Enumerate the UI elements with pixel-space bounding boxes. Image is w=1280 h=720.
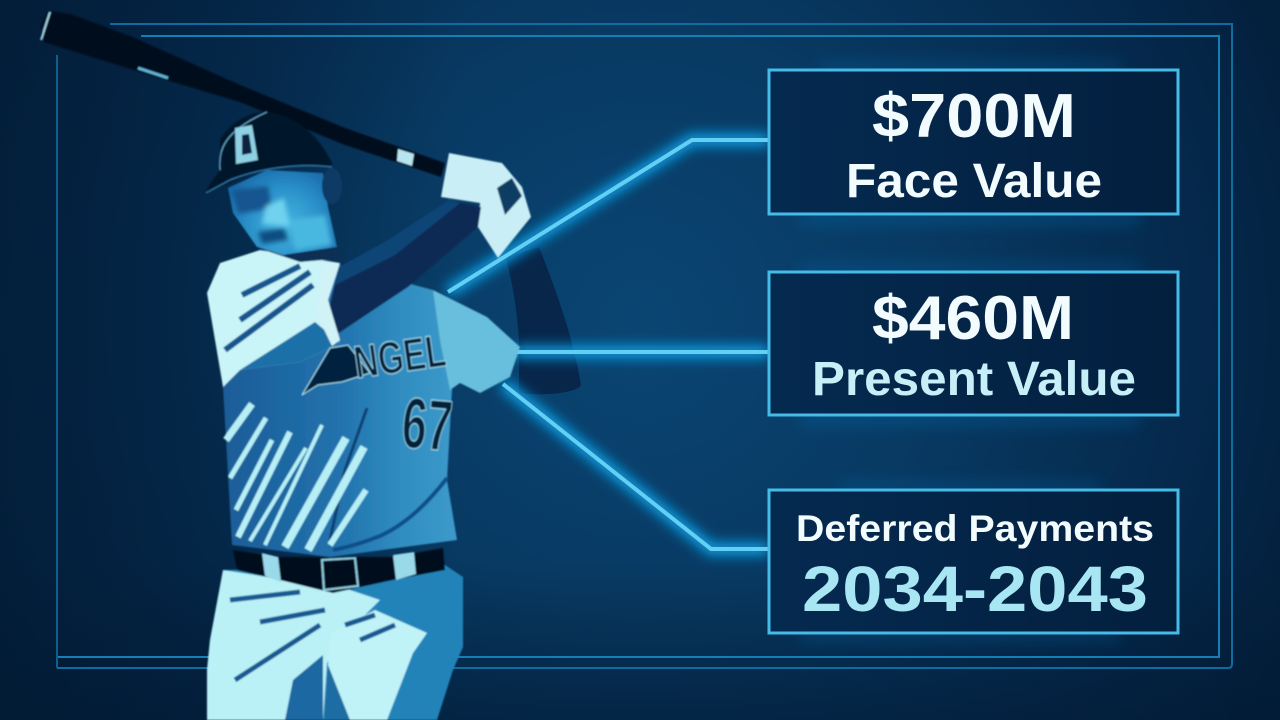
connector: face value xyxy=(448,140,768,292)
connector: deferred payments xyxy=(503,384,768,549)
torso xyxy=(223,265,457,557)
panel: face value xyxy=(769,70,1178,214)
years: 2034-2043 xyxy=(802,553,1148,625)
ear xyxy=(322,168,342,204)
shoulder sleeve xyxy=(207,250,340,387)
jersey number: 67 xyxy=(399,383,455,467)
cap logo xyxy=(235,125,258,164)
box glows xyxy=(800,64,1140,639)
label: deferred payments: Deferred Payments xyxy=(796,508,1154,549)
face shading xyxy=(232,186,332,250)
amount: 700M: $700M xyxy=(872,82,1076,151)
torso fold xyxy=(333,478,447,550)
gloves xyxy=(441,153,531,258)
panel: deferred payments xyxy=(769,490,1178,633)
bat xyxy=(41,11,445,177)
far arm xyxy=(506,247,581,394)
amount: 460M: $460M xyxy=(872,284,1074,353)
player xyxy=(41,11,531,720)
cap xyxy=(206,112,332,193)
belt xyxy=(233,548,445,593)
label: present value: Present Value xyxy=(812,353,1136,406)
neck and head xyxy=(228,168,345,262)
wordmark: NGEL xyxy=(351,324,449,388)
connector lines xyxy=(448,140,768,549)
near arm xyxy=(326,200,481,333)
jersey lettering xyxy=(302,324,455,467)
right sleeve xyxy=(433,290,520,393)
jersey stripes xyxy=(226,404,366,550)
panel: present value xyxy=(769,272,1178,415)
lettering: big A xyxy=(302,345,370,395)
pants xyxy=(207,565,463,720)
label: face value: Face Value xyxy=(846,155,1102,208)
torso seam xyxy=(330,408,367,540)
connector: present value xyxy=(515,346,768,358)
